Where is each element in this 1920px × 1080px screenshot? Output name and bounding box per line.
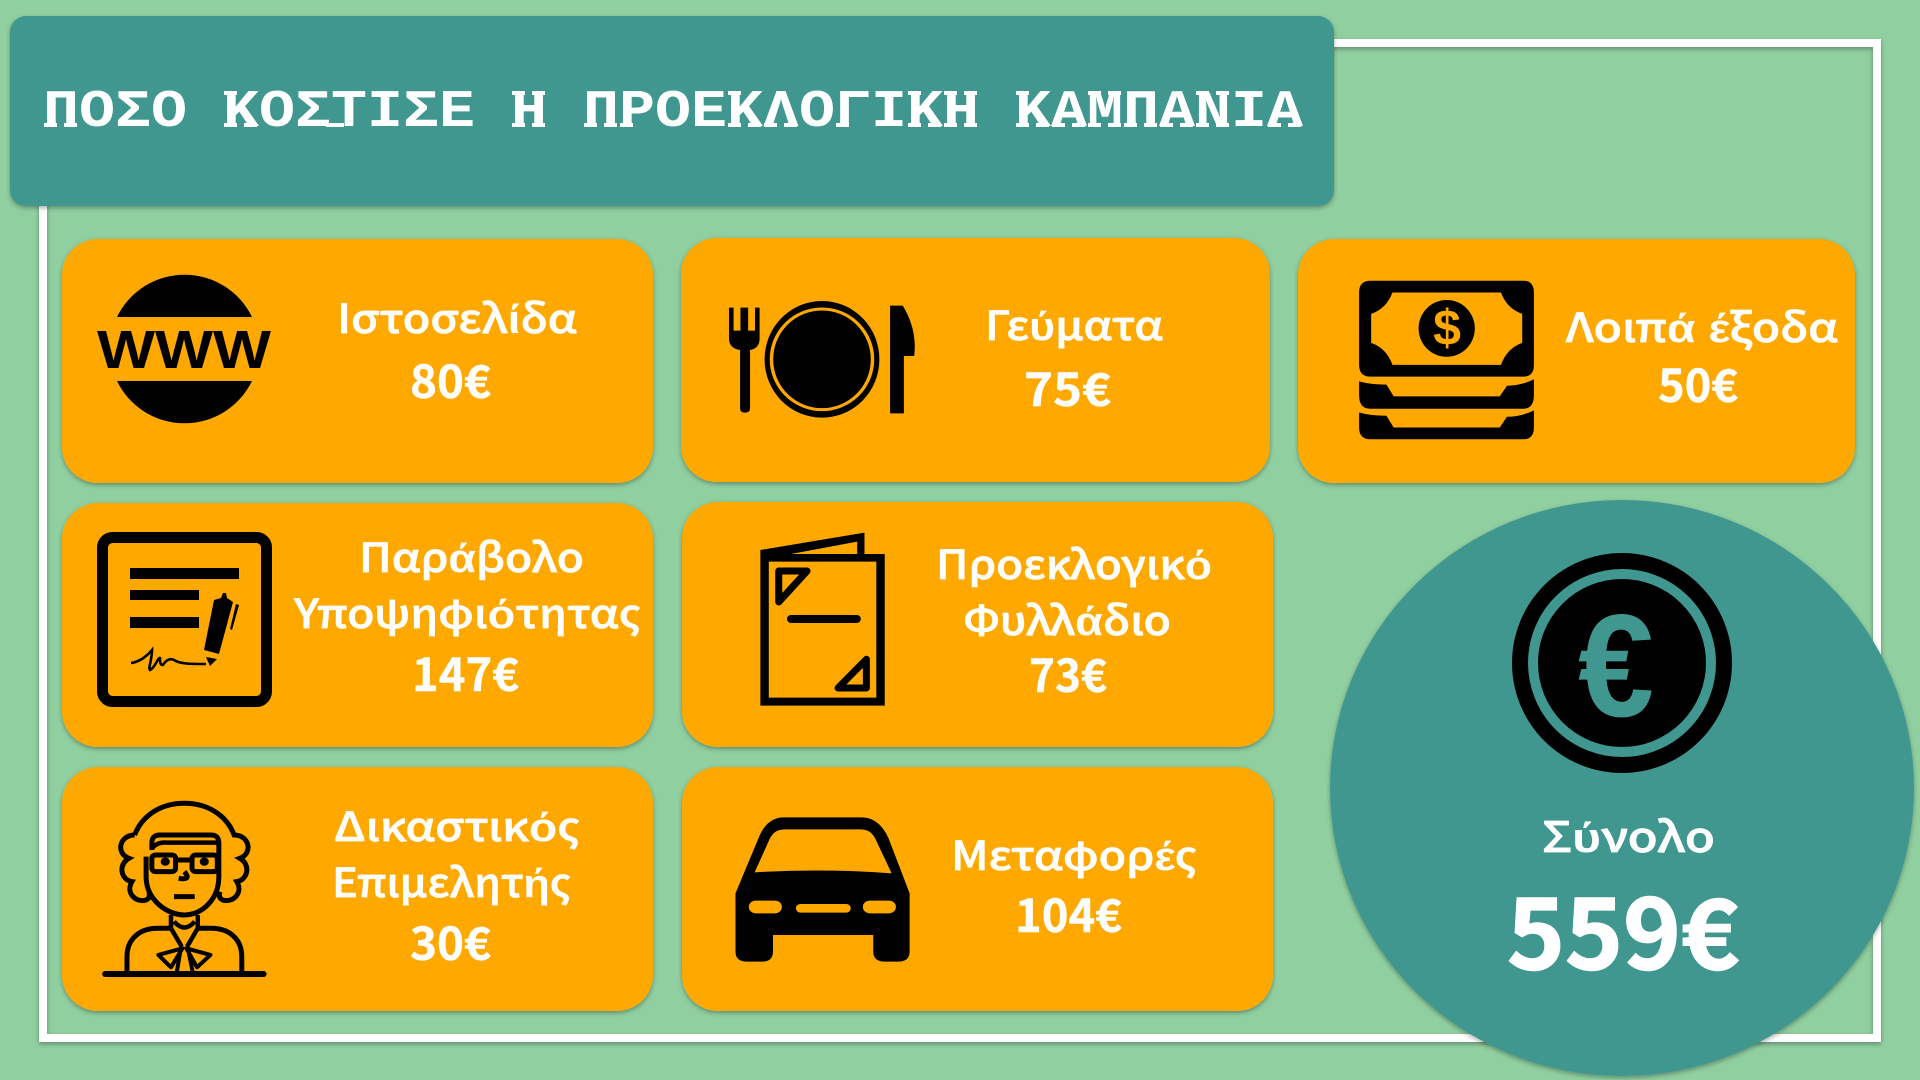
leaflet cost: 73€ — [1029, 640, 1107, 705]
other expenses cost: 50€ — [1658, 350, 1738, 415]
website cost: 80€ — [410, 346, 491, 411]
fee cost: 147€ — [412, 639, 519, 704]
leaflet label line 1: Προεκλογικ ό — [936, 533, 1212, 591]
bailiff label line 1: Δικαστικ ός — [334, 795, 580, 853]
transport label: Μεταφορ ές — [951, 824, 1197, 882]
icon: car — [735, 817, 910, 962]
meals label: Γεύματα — [985, 294, 1163, 352]
total cost: 559€ — [1507, 858, 1739, 997]
transport cost: 104€ — [1015, 880, 1122, 945]
bailiff label line 2: Επιμελητ ής — [332, 851, 571, 909]
icon: www globe — [97, 275, 271, 423]
icon: euro coin — [1512, 553, 1732, 773]
panel: candidacy fee — [62, 503, 653, 747]
icon: euro coin: € — [1578, 584, 1654, 747]
icon: judge with wig — [105, 803, 264, 974]
total label: Σύνολο — [1542, 804, 1715, 865]
panel: meals — [681, 238, 1270, 482]
fee label line 1: Παράβολο — [359, 526, 584, 584]
fee label line 2: Υποψηφι ότητας — [293, 582, 641, 640]
bailiff cost: 30€ — [410, 908, 491, 973]
meals cost: 75€ — [1024, 354, 1111, 419]
title: ΠΟΣΟ ΚΟΣΤΙΣΕ Η ΠΡΟΕΚΛΟΓΙΚΗ ΚΑΜΠΑΝΙΑ — [43, 82, 1303, 142]
website label: Ιστοσελ ίδα — [337, 287, 577, 345]
icon: stack of banknotes — [1359, 281, 1534, 439]
icon: folded leaflet — [760, 533, 885, 706]
panel: bailiff — [62, 767, 653, 1011]
panel: website — [62, 239, 653, 483]
other expenses label: Λοιπ ά έξοδα — [1565, 296, 1838, 354]
dollar sign: $ — [1433, 300, 1461, 356]
title banner — [10, 16, 1334, 206]
panel: other expenses — [1298, 239, 1855, 483]
icon: signed document — [102, 538, 266, 702]
panel: transport — [682, 767, 1273, 1011]
icon: plate and cutlery — [729, 301, 915, 418]
panel: total circle — [1330, 500, 1914, 1076]
leaflet label line 2: Φυλλ άδιο — [963, 589, 1171, 647]
icon: www globe: WWW — [97, 320, 271, 380]
panel: leaflet — [682, 502, 1273, 747]
